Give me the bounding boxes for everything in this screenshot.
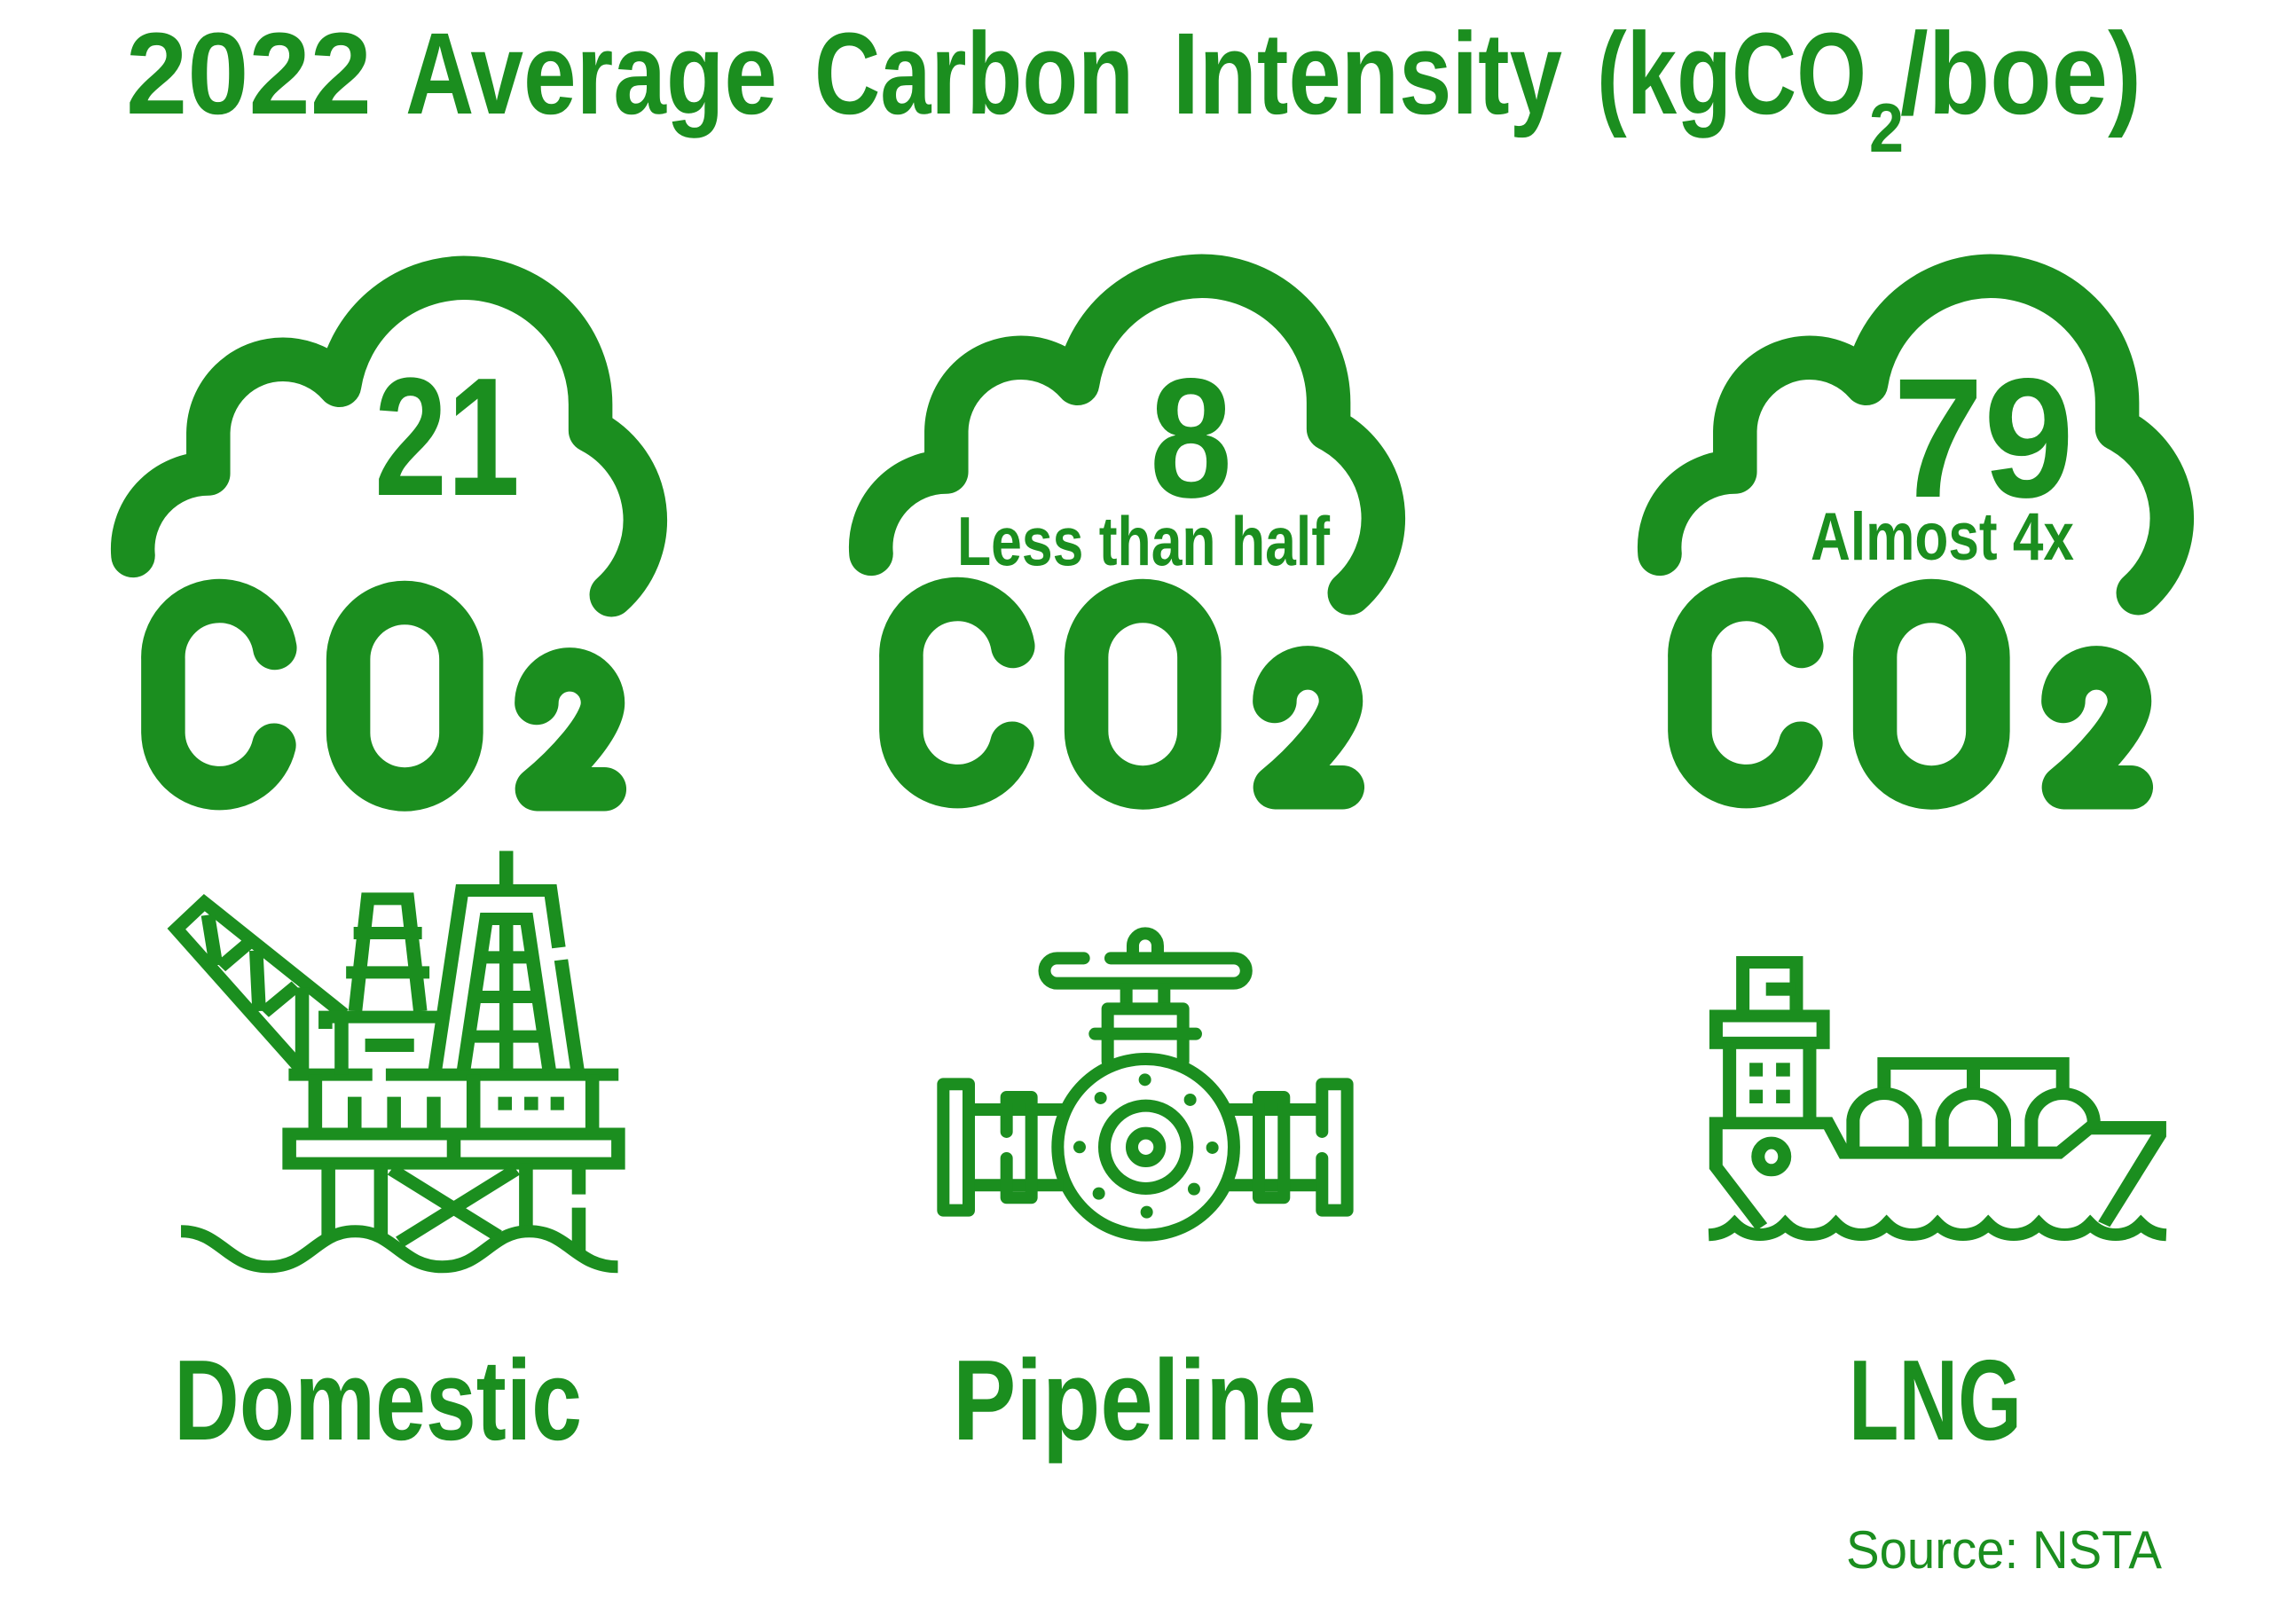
title: Intensity	[1173, 8, 1562, 138]
value: 21: 21	[374, 343, 520, 531]
caption: Almost 4x: Almost 4x	[1811, 499, 2074, 575]
icon: CO2 lettering	[901, 599, 1342, 788]
title	[126, 8, 2141, 167]
label: LNG: LNG	[1849, 1337, 2022, 1464]
panel: pipeline CO2 cloud	[871, 276, 1383, 788]
label: Pipeline: Pipeline	[953, 1337, 1316, 1464]
icon: offshore oil platform	[177, 851, 618, 1267]
icon: cloud	[133, 278, 645, 595]
icon: cloud	[1660, 276, 2172, 593]
value: 8: 8	[1150, 342, 1232, 533]
title: /boe)	[1900, 8, 2141, 138]
icon: CO2 lettering	[1690, 599, 2131, 788]
title: Average	[405, 8, 777, 138]
label: Domestic: Domestic	[174, 1337, 582, 1464]
title: 2	[1869, 89, 1904, 167]
icon: cloud	[871, 276, 1383, 593]
icon: CO2 lettering	[163, 600, 604, 789]
title: (kgCO	[1597, 8, 1866, 138]
source note: Source: NSTA	[1846, 1520, 2162, 1580]
icon: LNG carrier ship	[1709, 962, 2166, 1235]
value: 79: 79	[1893, 342, 2074, 533]
title: 2022	[126, 8, 372, 138]
panel: LNG CO2 cloud	[1660, 276, 2172, 788]
title: Carbon	[814, 8, 1134, 138]
panel: domestic CO2 cloud	[133, 278, 645, 789]
icon: pipeline valve	[943, 933, 1348, 1236]
caption: Less than half: Less than half	[957, 502, 1331, 580]
